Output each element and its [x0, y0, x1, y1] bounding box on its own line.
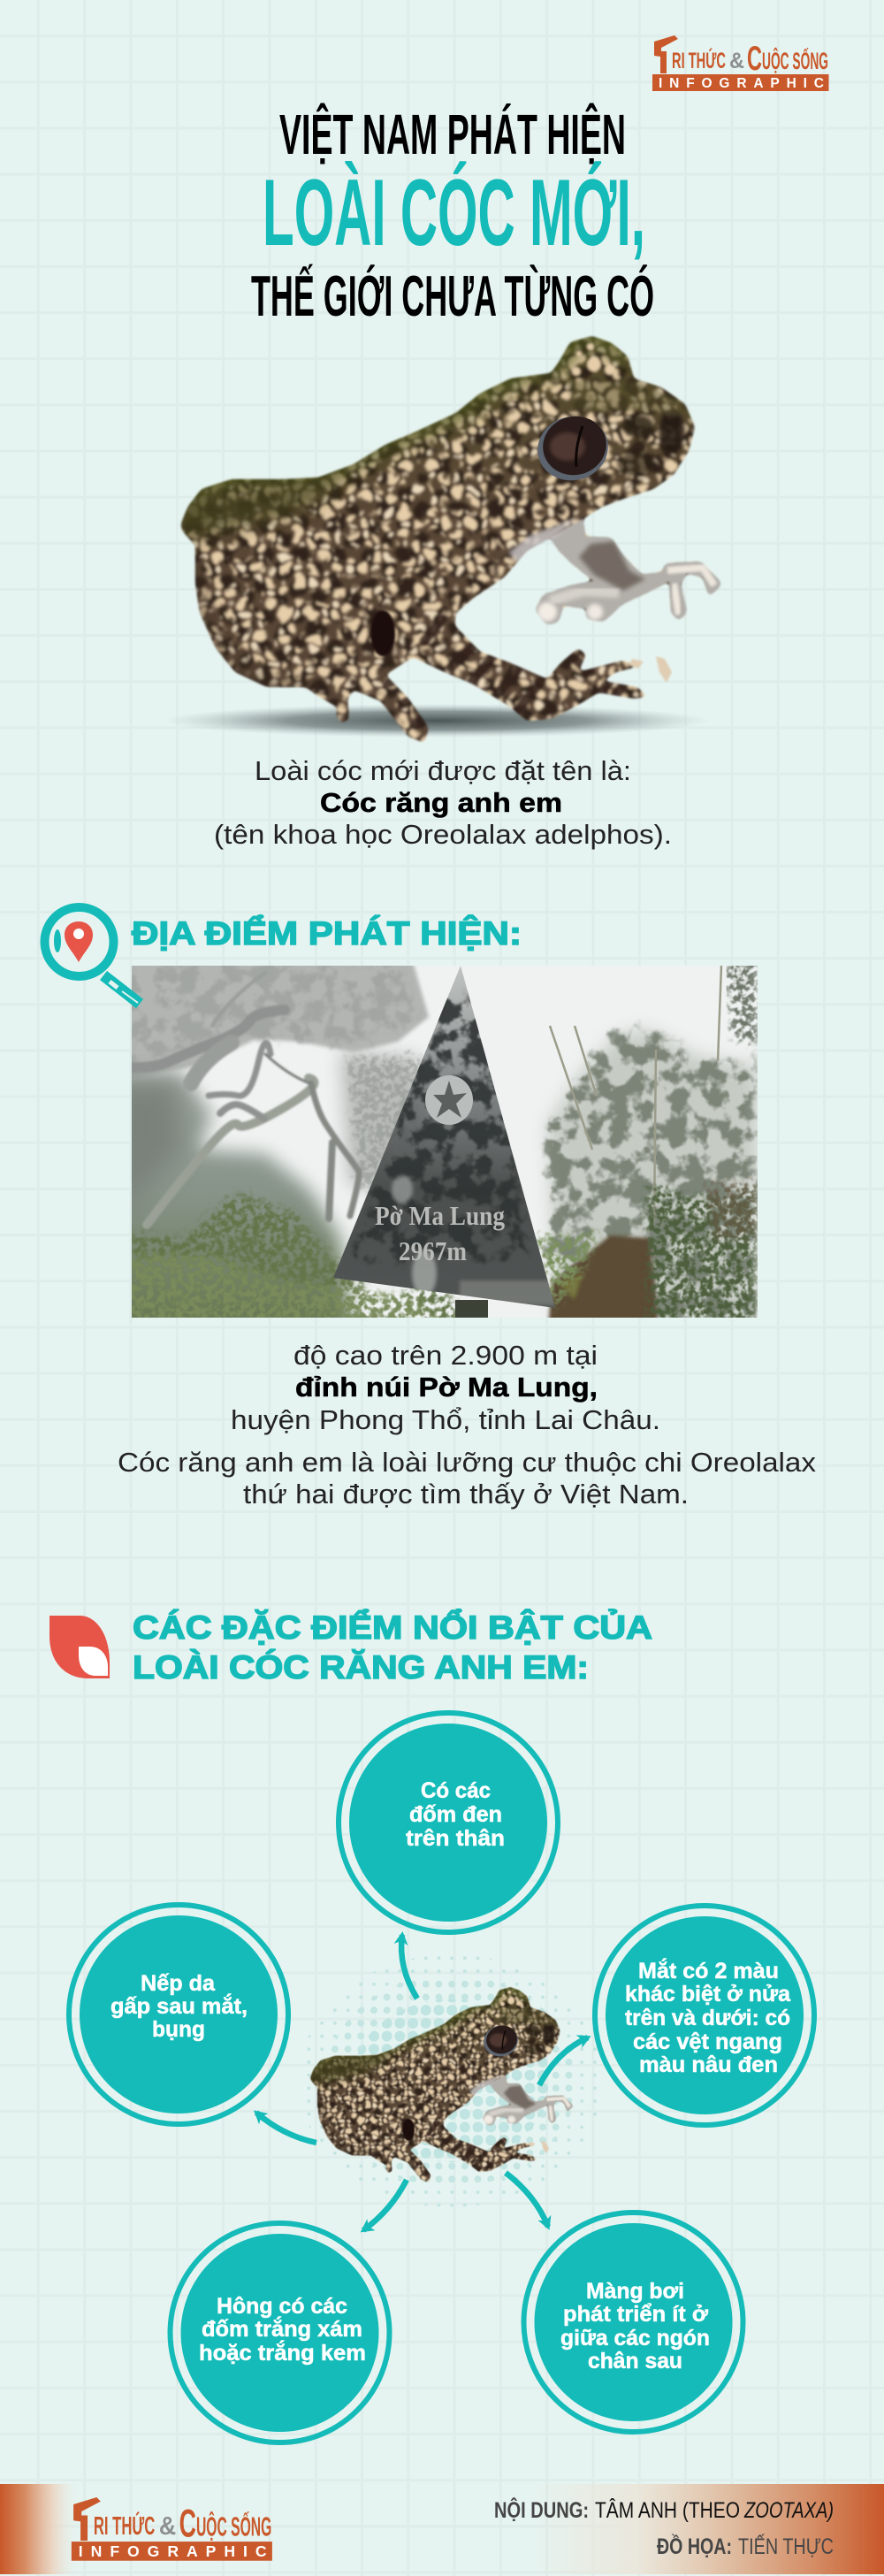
- frog illustration: [172, 332, 729, 747]
- logo: top right: [652, 35, 829, 91]
- arrow: to bottom-left circle: [363, 2180, 407, 2230]
- arrow: to right circle: [539, 2037, 588, 2085]
- arrow: to bottom-right circle: [506, 2173, 548, 2227]
- circle: skin folds: [69, 1905, 288, 2124]
- logo: top right: &: [729, 49, 744, 73]
- circle: two-coloured eyes: [595, 1906, 814, 2125]
- icon: red leaf: [50, 1616, 110, 1678]
- circle: white flank spots: Hông có các: [217, 2294, 347, 2319]
- footer credits: TIẾN THỰC: [738, 2534, 834, 2559]
- title: VIỆT NAM PHÁT HIỆN: [279, 102, 626, 166]
- circle: skin folds: gấp sau mắt,: [110, 1992, 248, 2019]
- logo: footer: UỘC SỐNG: [196, 2510, 271, 2542]
- circle: black spots on body: đốm đen: [409, 1802, 502, 1827]
- logo: footer: INFOGRAPHIC: [79, 2542, 267, 2560]
- circle: skin folds: Nếp da: [141, 1971, 216, 1996]
- footer credits: NỘI DUNG:: [494, 2496, 589, 2523]
- footer credits: [494, 2496, 834, 2559]
- circle: webbed toes: chân sau: [588, 2349, 682, 2373]
- post under the sign: [455, 1300, 488, 1319]
- logo: footer: RI THỨC: [94, 2512, 155, 2541]
- circle: webbed toes: giữa các ngón: [560, 2326, 710, 2351]
- photo: Pờ Ma Lung summit marker: [132, 966, 758, 1318]
- logo: footer: C: [179, 2502, 196, 2545]
- location description text: đỉnh núi Pờ Ma Lung,: [295, 1372, 598, 1403]
- location description text: huyện Phong Thổ, tỉnh Lai Châu.: [231, 1404, 660, 1435]
- arrow: to left circle: [256, 2113, 316, 2143]
- heading: notable characteristics: LOÀI CÓC RĂNG ANH EM:: [133, 1648, 589, 1685]
- location description text: Cóc răng anh em là loài lưỡng cư thuộc chi Oreolalax: [118, 1447, 817, 1478]
- circle: black spots on body: Có các: [421, 1778, 491, 1803]
- circle: two-coloured eyes: trên và dưới: có: [625, 2006, 790, 2030]
- central frog illustration: [306, 1985, 577, 2184]
- footer credits: ĐỒ HỌA:: [657, 2533, 732, 2559]
- frog ground shadow: [163, 704, 711, 738]
- footer credits: ZOOTAXA): [743, 2498, 834, 2523]
- circle: webbed toes: Màng bơi: [586, 2279, 684, 2304]
- footer credits: TÂM ANH (THEO: [595, 2497, 740, 2523]
- circle: two-coloured eyes: Mắt có 2 màu: [638, 1957, 779, 1984]
- triangular sign: Pờ Ma Lung: [375, 1200, 505, 1231]
- species name text: (tên khoa học Oreolalax adelphos).: [214, 819, 672, 850]
- logo: top right: INFOGRAPHIC: [659, 76, 824, 91]
- logo: footer: [72, 2497, 272, 2561]
- arrow: to top circle: [401, 1935, 417, 1999]
- heading: notable characteristics: CÁC ĐẶC ĐIỂM NỔI BẬT CỦA: [133, 1608, 652, 1646]
- species name text: [214, 755, 672, 850]
- circle: skin folds: bụng: [152, 2017, 205, 2042]
- heading: notable characteristics: [133, 1608, 652, 1685]
- circle: webbed toes: phát triển ít ở: [563, 2302, 708, 2327]
- circle: black spots on body: trên thân: [406, 1826, 505, 1851]
- circle: white flank spots: đốm trắng xám: [202, 2315, 362, 2342]
- footer band: [0, 2484, 884, 2574]
- location description text: độ cao trên 2.900 m tại: [293, 1340, 598, 1371]
- species name text: Loài cóc mới được đặt tên là:: [255, 755, 631, 786]
- triangular sign: [333, 966, 566, 1308]
- title: [251, 102, 654, 328]
- circle: white flank spots: hoặc trắng kem: [199, 2339, 366, 2366]
- circle: webbed toes: [523, 2213, 743, 2432]
- halftone dots behind frog: [299, 1954, 603, 2207]
- logo: footer: &: [159, 2512, 176, 2541]
- species name text: Cóc răng anh em: [320, 787, 562, 818]
- circle: white flank spots: [170, 2223, 389, 2442]
- triangular sign: 2967m: [399, 1235, 467, 1266]
- logo: top right: C: [747, 40, 762, 78]
- heading: discovery location: ĐỊA ĐIỂM PHÁT HIỆN:: [132, 914, 522, 952]
- location description text: thứ hai được tìm thấy ở Việt Nam.: [243, 1479, 689, 1510]
- circle: two-coloured eyes: các vệt ngang: [633, 2029, 782, 2054]
- logo: top right: RI THỨC: [672, 47, 726, 73]
- icon: magnifier with location pin: [44, 907, 140, 1004]
- circle: two-coloured eyes: màu nâu đen: [639, 2052, 778, 2077]
- location description text: [118, 1340, 817, 1510]
- circle: black spots on body: [339, 1713, 558, 1932]
- circle: two-coloured eyes: khác biệt ở nửa: [625, 1982, 791, 2007]
